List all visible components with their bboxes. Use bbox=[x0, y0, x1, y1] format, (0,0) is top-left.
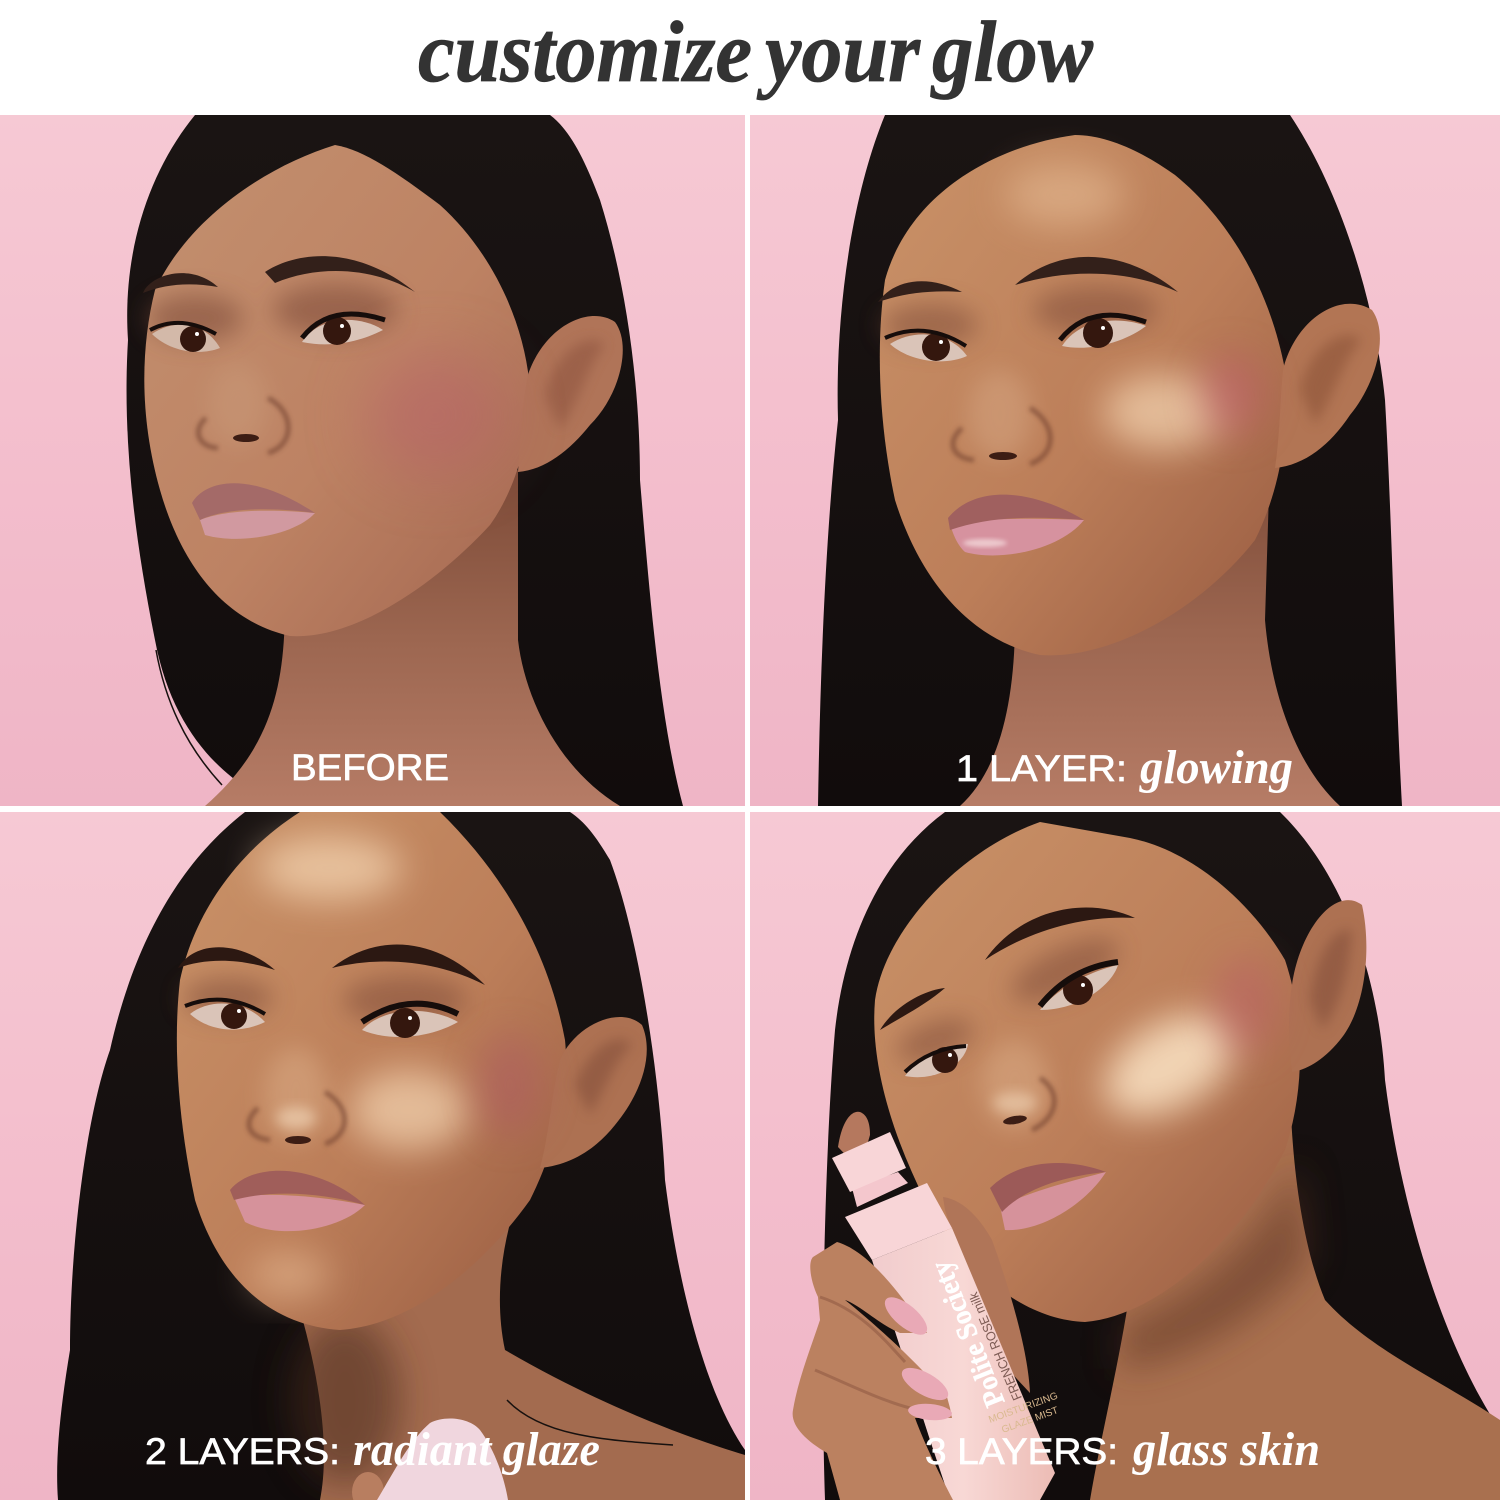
lower lip bbox=[1000, 1172, 1106, 1230]
bottle neck bbox=[852, 1172, 908, 1207]
label: 1 layer bbox=[956, 741, 1293, 794]
inner ear shadow bbox=[575, 1039, 632, 1115]
cheek blush bbox=[478, 1033, 542, 1137]
face bbox=[177, 812, 566, 1330]
forehead highlight bbox=[1005, 163, 1125, 227]
ear bbox=[518, 316, 623, 472]
eye socket shadows bbox=[183, 976, 467, 1024]
lower lip bbox=[950, 519, 1084, 555]
panel: before bbox=[0, 115, 745, 806]
inner ear shadow bbox=[545, 340, 602, 424]
title: your bbox=[757, 3, 921, 100]
title: glow bbox=[930, 3, 1094, 100]
nose bbox=[981, 1040, 1054, 1130]
face bbox=[874, 822, 1300, 1322]
neck and chest bbox=[960, 508, 1340, 806]
bottle body bbox=[872, 1228, 1055, 1500]
neck shadow bbox=[290, 1315, 400, 1485]
eyes bbox=[185, 1000, 458, 1038]
thumb bbox=[943, 1197, 1030, 1393]
bottle product name: FRENCH ROSE milk bbox=[965, 1290, 1025, 1403]
eyebrows bbox=[178, 945, 485, 985]
nails bbox=[879, 1291, 953, 1422]
backdrop bbox=[0, 812, 745, 1500]
nose bbox=[198, 363, 288, 453]
bottle brand: Polite Society bbox=[925, 1256, 1012, 1411]
title: customize bbox=[418, 3, 752, 100]
cheek highlight bbox=[1087, 993, 1253, 1137]
panel: 1 layer bbox=[750, 115, 1500, 806]
bottle descriptor: MOISTURIZING bbox=[987, 1391, 1060, 1426]
neck and shoulder bbox=[304, 1226, 745, 1500]
backdrop bbox=[750, 812, 1500, 1500]
label: 2 layers bbox=[145, 1423, 600, 1476]
label: 3 layers: 3 LAYERS: bbox=[925, 1431, 1118, 1472]
hair bbox=[57, 812, 745, 1500]
eyes bbox=[885, 315, 1146, 361]
back finger bbox=[838, 1112, 870, 1170]
hair bbox=[818, 115, 1402, 806]
nose bbox=[953, 370, 1050, 464]
ear bbox=[540, 1017, 647, 1168]
eyebrows bbox=[143, 256, 415, 293]
cheek highlight bbox=[1103, 374, 1227, 450]
cheek blush bbox=[371, 358, 485, 464]
upper lip bbox=[948, 495, 1084, 530]
ear bbox=[1289, 900, 1366, 1072]
eyes bbox=[150, 314, 385, 352]
bottle descriptor line two: GLAZE MIST bbox=[1000, 1405, 1060, 1436]
cheek blush bbox=[1200, 353, 1264, 437]
finger creases bbox=[815, 1297, 910, 1408]
upper lip bbox=[990, 1163, 1106, 1212]
chin highlight bbox=[250, 1253, 330, 1297]
eyebrows bbox=[880, 907, 1135, 1030]
lip gloss bbox=[963, 539, 1007, 547]
eye socket shadows bbox=[882, 286, 1157, 347]
inner ear shadow bbox=[1300, 335, 1362, 425]
nose bbox=[249, 1047, 345, 1144]
hair bbox=[823, 812, 1500, 1500]
lower lip bbox=[200, 511, 315, 539]
cheek highlight bbox=[350, 1070, 470, 1150]
upper lip bbox=[192, 483, 315, 520]
panel: 3 layers bbox=[750, 812, 1500, 1500]
cheek blush bbox=[1213, 955, 1277, 1055]
upper lip bbox=[230, 1171, 365, 1205]
hair bbox=[127, 115, 683, 806]
loose strand bbox=[156, 650, 222, 785]
fingertip bbox=[352, 1472, 384, 1500]
title bbox=[418, 3, 1094, 100]
shoulder strand bbox=[507, 1400, 673, 1445]
bottle cap bbox=[832, 1132, 906, 1192]
label: 1 layer: glowing bbox=[1139, 741, 1293, 794]
eye socket shadows bbox=[147, 284, 397, 342]
label: 2 layers: radiant glaze bbox=[353, 1423, 600, 1476]
label: 3 layers: glass skin bbox=[1132, 1423, 1320, 1476]
neck and chest bbox=[205, 470, 620, 806]
label: 3 layers bbox=[925, 1423, 1320, 1476]
bottle in hand bbox=[793, 1112, 1060, 1500]
backdrop bbox=[750, 115, 1500, 806]
neck and shoulder bbox=[1090, 1070, 1500, 1500]
panel: 2 layers bbox=[0, 812, 745, 1500]
label: 2 layers: 2 LAYERS: bbox=[145, 1431, 340, 1472]
face bbox=[880, 135, 1286, 655]
lower lip bbox=[234, 1195, 365, 1231]
label: before: BEFORE bbox=[291, 747, 449, 788]
hand bbox=[793, 1242, 953, 1500]
eyebrows bbox=[878, 257, 1178, 302]
bottle shoulder bbox=[845, 1183, 952, 1260]
bottle top bbox=[377, 1419, 508, 1500]
inner ear shadow bbox=[1310, 929, 1352, 1030]
face bbox=[144, 145, 530, 636]
eye socket shadows bbox=[891, 926, 1127, 1071]
eyes bbox=[905, 962, 1118, 1077]
backdrop bbox=[0, 115, 745, 806]
ear bbox=[1275, 304, 1380, 468]
forehead highlight bbox=[258, 836, 402, 900]
label: 1 layer: 1 LAYER: bbox=[956, 748, 1127, 789]
jaw shadow bbox=[1120, 1160, 1310, 1370]
